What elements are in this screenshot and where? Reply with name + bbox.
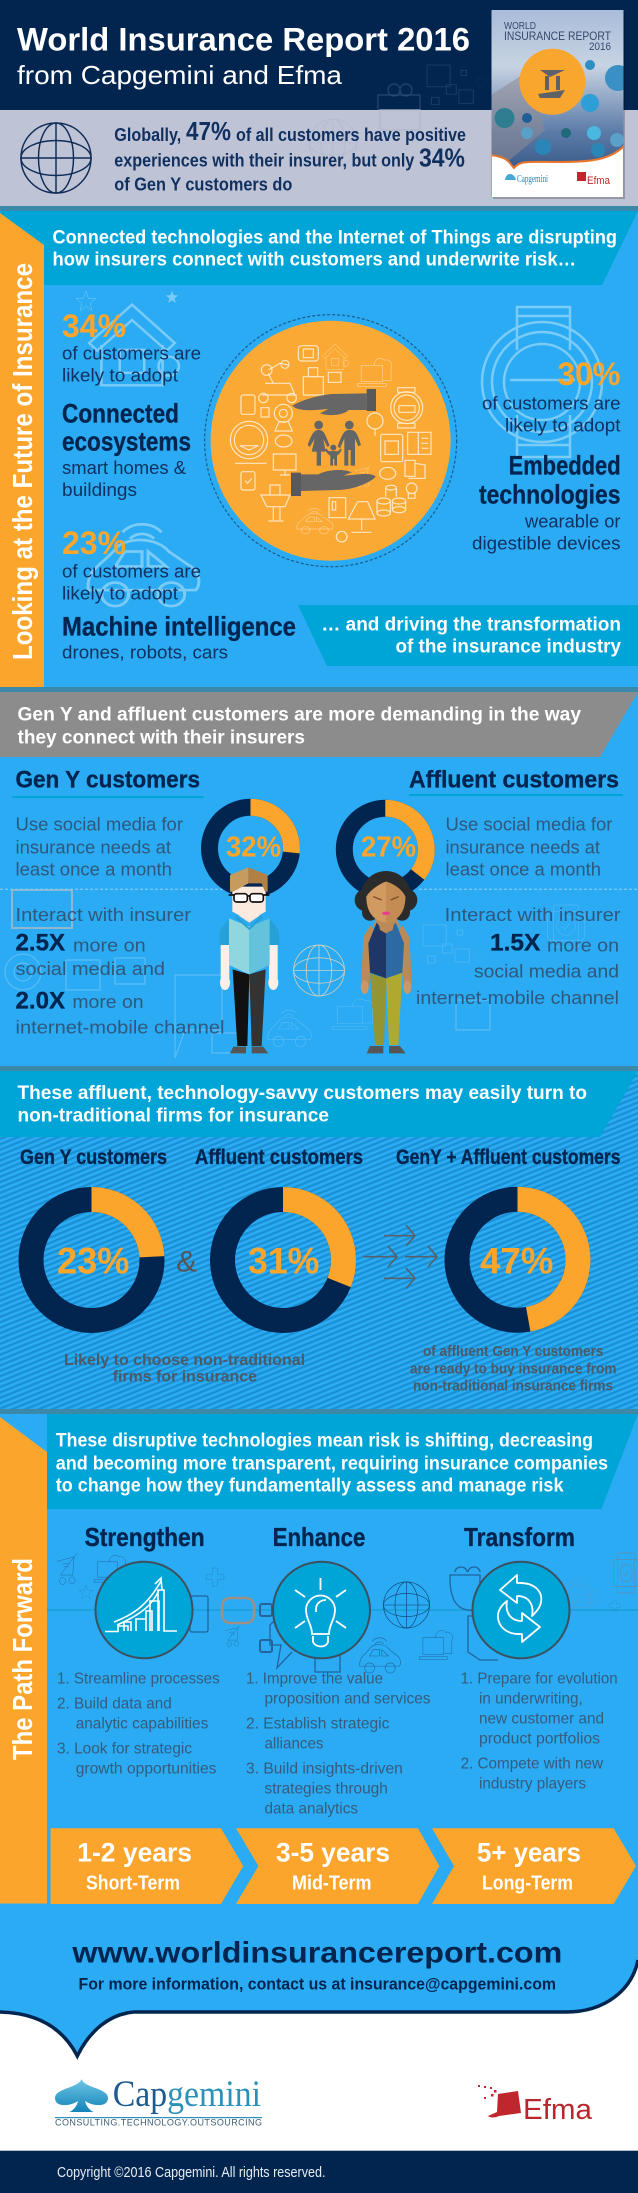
- left column: Gen Y customers: more on: [72, 992, 144, 1012]
- caption: ready to buy: [410, 1344, 616, 1395]
- stat: connected ecosystems: 34%: [62, 308, 126, 344]
- chevron: mid-term: 3-5 years: [276, 1838, 390, 1868]
- list: enhance: strategies through: [264, 1780, 388, 1797]
- subtitle: from Capgemini and Efma: [17, 60, 343, 90]
- logo: Efma: Efma: [523, 2094, 593, 2126]
- chevron: mid-term: [236, 1828, 439, 1904]
- list: enhance: 2. Establish strategic: [246, 1715, 389, 1732]
- heading banner: non-traditional firms for insurance: [18, 1106, 329, 1127]
- family: [308, 421, 361, 466]
- donut: Gen Y 32%: [210, 807, 292, 889]
- list: enhance: data analytics: [264, 1800, 358, 1817]
- donut: Affluent 27%: [344, 808, 426, 890]
- chevron: long-term: [432, 1828, 636, 1904]
- stat: embedded technologies: 30%: [558, 356, 620, 392]
- left column: Gen Y customers: Use social media for: [16, 815, 183, 835]
- right column: Affluent customers: Affluent customers: [409, 766, 619, 793]
- left column: Gen Y customers: insurance needs at: [16, 837, 171, 857]
- cover title: WORLD: [504, 21, 536, 32]
- stat: connected ecosystems: of customers are: [62, 343, 201, 363]
- stat: connected ecosystems: buildings: [62, 480, 137, 500]
- panel: global statistic band: [0, 110, 638, 211]
- closing banner: … and driving the transformation: [321, 615, 621, 636]
- line icons ring: [230, 344, 431, 542]
- heading banner: [47, 1414, 638, 1509]
- chevron: long-term: Long-Term: [482, 1872, 573, 1894]
- icon: wearable watch: [482, 307, 602, 457]
- icon: connected car: [88, 524, 199, 606]
- panel: Gen Y and affluent customers: [0, 692, 638, 1071]
- icon: light bulb: [273, 1562, 370, 1658]
- list: strengthen: 3. Look for strategic: [57, 1740, 192, 1757]
- list: transform: 2. Compete with new: [461, 1755, 603, 1772]
- donut: 47%: [457, 1199, 578, 1320]
- caption: likely to choose: firms for insurance: [113, 1369, 257, 1386]
- website and contact: www.worldinsurancereport.com: [71, 1937, 562, 1970]
- list: strengthen: [57, 1670, 220, 1777]
- logo: Capgemini: Capgemini: [113, 2074, 261, 2115]
- statistic text: 34%: [419, 143, 465, 173]
- column headings: Affluent customers: [195, 1146, 363, 1169]
- cover logos: Capgemini: [517, 174, 548, 185]
- heading banner: [0, 692, 638, 757]
- stat: machine intelligence: likely to adopt: [62, 583, 178, 603]
- left column: Gen Y customers: 2.0X: [16, 987, 65, 1014]
- caption: likely to choose: [64, 1352, 305, 1386]
- icon: globe: [294, 945, 344, 996]
- logo: Capgemini: [55, 2074, 262, 2128]
- website and contact: For more information, contact us at insurance@capgemini.com: [78, 1975, 556, 1993]
- heading banner: and becoming more transparent, requiring insurance companies: [56, 1453, 608, 1474]
- stat: connected ecosystems: likely to adopt: [62, 366, 178, 386]
- donut: 23%: [31, 1200, 152, 1320]
- column headings: Gen Y customers: [20, 1146, 167, 1169]
- closing banner: [298, 605, 638, 666]
- report cover: Efma: [587, 175, 611, 187]
- closing banner: of the insurance industry: [396, 637, 621, 658]
- heading banner: Connected technologies and the Internet of Things are disrupting: [52, 227, 617, 248]
- stat: machine intelligence: [62, 525, 296, 662]
- website and contact: [71, 1937, 562, 1993]
- orange side tab: [0, 1417, 47, 1904]
- icon: transform arrows: [472, 1562, 570, 1658]
- title: World Insurance Report 2016: [17, 22, 470, 58]
- stat: connected ecosystems: [62, 308, 201, 500]
- faint header icons: [378, 65, 487, 110]
- column headings: [20, 1146, 620, 1169]
- figure: affluent woman: [355, 871, 417, 1053]
- list: transform: industry players: [479, 1775, 586, 1792]
- orange side tab: Looking at the Future of Insurance: [7, 263, 38, 660]
- stat: machine intelligence: drones, robots, cars: [62, 642, 228, 662]
- central orange circle with family and icons: [205, 315, 457, 567]
- stat: machine intelligence: of customers are: [62, 561, 201, 581]
- heading banner: [0, 1071, 638, 1137]
- caption: ready to buy: are ready to buy insurance from: [410, 1361, 616, 1377]
- statistic text: 47%: [186, 116, 231, 146]
- chevron: mid-term: Mid-Term: [292, 1872, 372, 1894]
- right column: Affluent customers: social media and: [474, 961, 619, 981]
- right column: Affluent customers: Interact with insurer: [445, 905, 621, 925]
- statistic text: Globally,: [114, 125, 181, 145]
- chevron: short-term: 1-2 years: [77, 1838, 192, 1868]
- donut: 47%: 47%: [480, 1240, 553, 1281]
- stat: machine intelligence: 23%: [62, 525, 126, 561]
- stat: embedded technologies: likely to adopt: [505, 416, 620, 436]
- statistic text: experiences with their insurer, but only: [114, 151, 414, 171]
- bottom hand: [301, 470, 376, 491]
- heading banner: [0, 211, 638, 285]
- heading banner: to change how they fundamentally assess and manage risk: [56, 1476, 564, 1497]
- list: enhance: [246, 1670, 430, 1817]
- list: strengthen: 1. Streamline processes: [57, 1670, 220, 1687]
- icon: growth chart: [96, 1562, 192, 1658]
- stat: machine intelligence: Machine intelligence: [62, 612, 296, 642]
- left column: Gen Y customers: Interact with insurer: [16, 905, 191, 925]
- list: enhance: 1. Improve the value: [246, 1670, 383, 1687]
- caption: likely to choose: Likely to choose non-traditional: [64, 1352, 305, 1369]
- heading banner: These disruptive technologies mean risk is shifting, decreasing: [56, 1431, 593, 1452]
- list: strengthen: analytic capabilities: [76, 1715, 208, 1732]
- column headings: Strengthen: [85, 1522, 205, 1552]
- cover orange circle: [520, 49, 586, 115]
- statistic text: of Gen Y customers do: [114, 175, 292, 195]
- footer: [0, 2151, 638, 2193]
- background icons: [57, 1553, 638, 1673]
- stat: embedded technologies: of customers are: [482, 393, 620, 413]
- donut: 23%: 23%: [57, 1240, 129, 1281]
- icon: house with stars: [76, 291, 179, 385]
- donut: 31%: 31%: [248, 1240, 319, 1281]
- left column: Gen Y customers: [12, 766, 224, 1037]
- list: transform: new customer and: [479, 1710, 604, 1727]
- report cover: INSURANCE REPORT: [504, 29, 612, 43]
- orange side tab: [0, 213, 44, 687]
- panel: future of insurance: [0, 211, 638, 692]
- ampersand: &: [176, 1246, 197, 1279]
- caption: ready to buy: of affluent Gen Y customers: [423, 1344, 603, 1360]
- column headings: Transform: [464, 1522, 575, 1552]
- heading banner: how insurers connect with customers and underwrite risk…: [52, 250, 576, 271]
- donut: Gen Y 32%: 32%: [226, 832, 281, 864]
- list: enhance: 3. Build insights-driven: [246, 1760, 403, 1777]
- right column: Affluent customers: least once a month: [446, 860, 601, 880]
- heading banner: Gen Y and affluent customers are more demanding in the way: [18, 705, 581, 726]
- icon: globe: [21, 123, 91, 193]
- right column: Affluent customers: more on: [547, 936, 619, 956]
- report cover: 2016: [589, 41, 611, 53]
- report cover: [491, 10, 631, 200]
- list: transform: in underwriting,: [479, 1690, 583, 1707]
- arrows: [363, 1225, 437, 1288]
- left column: Gen Y customers: Gen Y customers: [16, 766, 200, 793]
- stat: embedded technologies: digestible devices: [472, 533, 620, 553]
- list: transform: product portfolios: [479, 1730, 600, 1747]
- list: transform: [461, 1670, 618, 1792]
- chevron: long-term: 5+ years: [477, 1838, 581, 1868]
- stat: embedded technologies: wearable or: [524, 511, 620, 531]
- left column: Gen Y customers: 2.5X: [16, 930, 65, 957]
- stat: connected ecosystems: ecosystems: [62, 427, 191, 457]
- right column: Affluent customers: Use social media for: [446, 815, 612, 835]
- chevron: short-term: [50, 1828, 243, 1904]
- heading banner: they connect with their insurers: [18, 727, 305, 748]
- left column: Gen Y customers: social media and: [16, 959, 165, 979]
- panel: the path forward: [0, 1414, 638, 2056]
- list: enhance: proposition and services: [264, 1690, 430, 1707]
- dashed divider: [0, 888, 638, 890]
- column headings: Enhance: [273, 1522, 365, 1552]
- statistic text: of all customers have positive: [236, 125, 466, 145]
- stat: embedded technologies: [472, 356, 621, 553]
- orange side tab: The Path Forward: [7, 1558, 38, 1760]
- right column: Affluent customers: 1.5X: [490, 930, 540, 957]
- panel: non-traditional firms: [0, 1071, 638, 1414]
- donut: Affluent 27%: 27%: [361, 832, 416, 864]
- top hand: [292, 393, 367, 415]
- logo: Efma: [478, 2085, 593, 2126]
- left column: Gen Y customers: least once a month: [16, 860, 172, 880]
- left column: Gen Y customers: more on: [73, 936, 146, 956]
- logo: Capgemini: CONSULTING.TECHNOLOGY.OUTSOURCING: [55, 2118, 262, 2128]
- header band: [0, 0, 638, 110]
- list: strengthen: growth opportunities: [76, 1760, 216, 1777]
- background icons: [5, 890, 584, 1058]
- footer: Copyright ©2016 Capgemini. All rights reserved.: [57, 2164, 326, 2181]
- chevron: short-term: Short-Term: [86, 1872, 180, 1894]
- figure: Gen Y man: [219, 867, 279, 1053]
- left column: Gen Y customers: internet-mobile channel: [16, 1017, 224, 1037]
- right column: Affluent customers: [409, 766, 623, 1008]
- stat: connected ecosystems: Connected: [62, 399, 179, 429]
- donut: 31%: [222, 1200, 344, 1320]
- right column: Affluent customers: internet-mobile channel: [416, 988, 619, 1008]
- caption: ready to buy: non-traditional insurance firms: [413, 1379, 613, 1395]
- faint band icons: [309, 110, 420, 167]
- right column: Affluent customers: insurance needs at: [446, 837, 600, 857]
- list: enhance: alliances: [264, 1735, 324, 1752]
- list: strengthen: 2. Build data and: [57, 1695, 172, 1712]
- list: transform: 1. Prepare for evolution: [461, 1670, 618, 1687]
- heading banner: These affluent, technology-savvy customers may easily turn to: [18, 1083, 587, 1104]
- stat: connected ecosystems: smart homes &: [62, 458, 186, 478]
- column headings: [85, 1522, 575, 1552]
- statistic text: [114, 116, 466, 195]
